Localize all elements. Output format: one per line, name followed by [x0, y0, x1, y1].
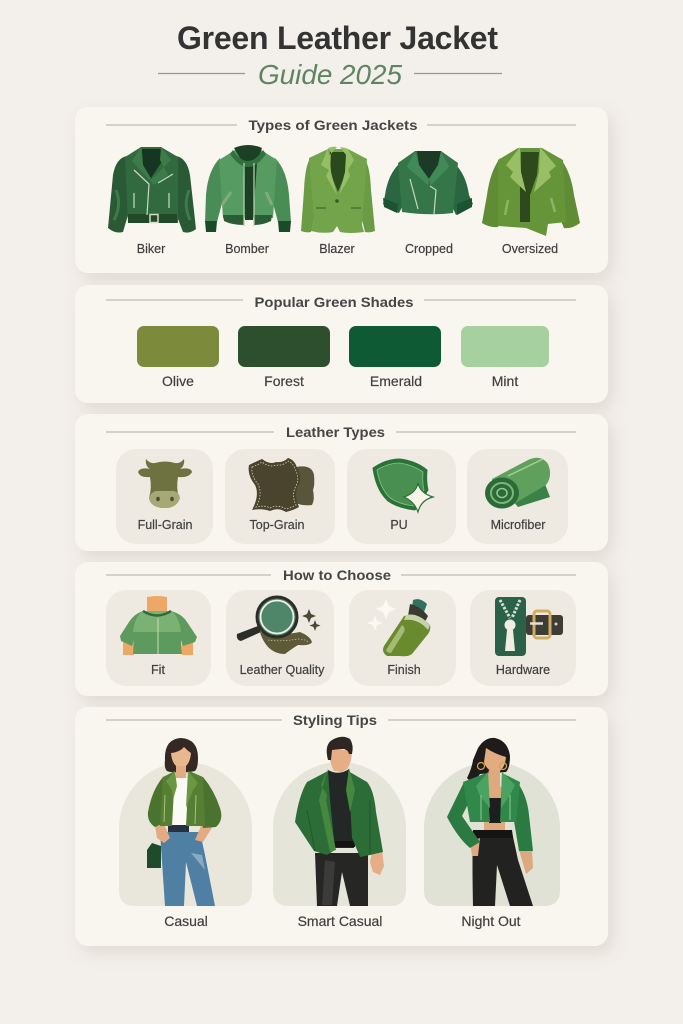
label: emerald: Emerald [370, 373, 422, 389]
label: cropped: Cropped [405, 242, 453, 256]
icon: blazer [301, 147, 375, 233]
figure: casual outfit [147, 738, 221, 906]
heading: leather types: Leather Types [286, 424, 385, 440]
panel: popular green shades [75, 285, 608, 403]
icon: bomber jacket [205, 145, 291, 232]
swatch: olive [137, 326, 219, 367]
swatch: mint [461, 326, 549, 367]
label: fit: Fit [151, 663, 165, 677]
icon: PU shield [373, 459, 433, 512]
label: leather quality: Leather Quality [240, 663, 325, 677]
swatch: forest [238, 326, 330, 367]
label: oversized: Oversized [502, 242, 558, 256]
icon: biker jacket [108, 147, 196, 233]
label: forest: Forest [264, 373, 304, 389]
heading: how to choose: How to Choose [283, 567, 391, 583]
label: biker: Biker [137, 242, 165, 256]
label: night out: Night Out [461, 913, 521, 929]
label: hardware: Hardware [496, 663, 550, 677]
icon: leather hide [249, 458, 314, 512]
panel: how to choose [75, 562, 608, 696]
icon: cow head [138, 459, 192, 508]
label: casual: Casual [164, 913, 208, 929]
icon: microfiber roll [485, 458, 550, 508]
label: full-grain: Full-Grain [138, 518, 192, 532]
label: microfiber: Microfiber [491, 518, 545, 532]
heading: styling tips: Styling Tips [293, 712, 377, 728]
label: olive: Olive [162, 373, 194, 389]
swatch: emerald [349, 326, 441, 367]
label: mint: Mint [492, 373, 518, 389]
icon: fit torso [120, 596, 197, 655]
icon: oversized jacket [482, 147, 580, 236]
panel: styling tips [75, 707, 608, 946]
label: smart casual: Smart Casual [298, 913, 382, 929]
icon: cropped jacket [383, 151, 473, 215]
figure: smart casual outfit [295, 737, 384, 906]
icon: finish spray bottle [367, 599, 430, 656]
panel: leather types [75, 414, 608, 551]
figure: night out outfit [447, 738, 533, 906]
label: finish: Finish [387, 663, 421, 677]
panel: types of green jackets [75, 107, 608, 273]
label: top-grain: Top-Grain [250, 518, 304, 532]
subtitle: Guide 2025 [258, 59, 402, 90]
label: bomber: Bomber [225, 242, 269, 256]
label: PU: PU [390, 518, 408, 532]
icon: zipper and buckle [495, 597, 563, 656]
label: blazer: Blazer [319, 242, 355, 256]
heading: types of green jackets: Types of Green Jackets [248, 117, 418, 133]
icon: magnifying glass on leather [237, 597, 320, 654]
title: Green Leather Jacket [177, 20, 498, 56]
heading: popular green shades: Popular Green Shades [254, 294, 414, 310]
